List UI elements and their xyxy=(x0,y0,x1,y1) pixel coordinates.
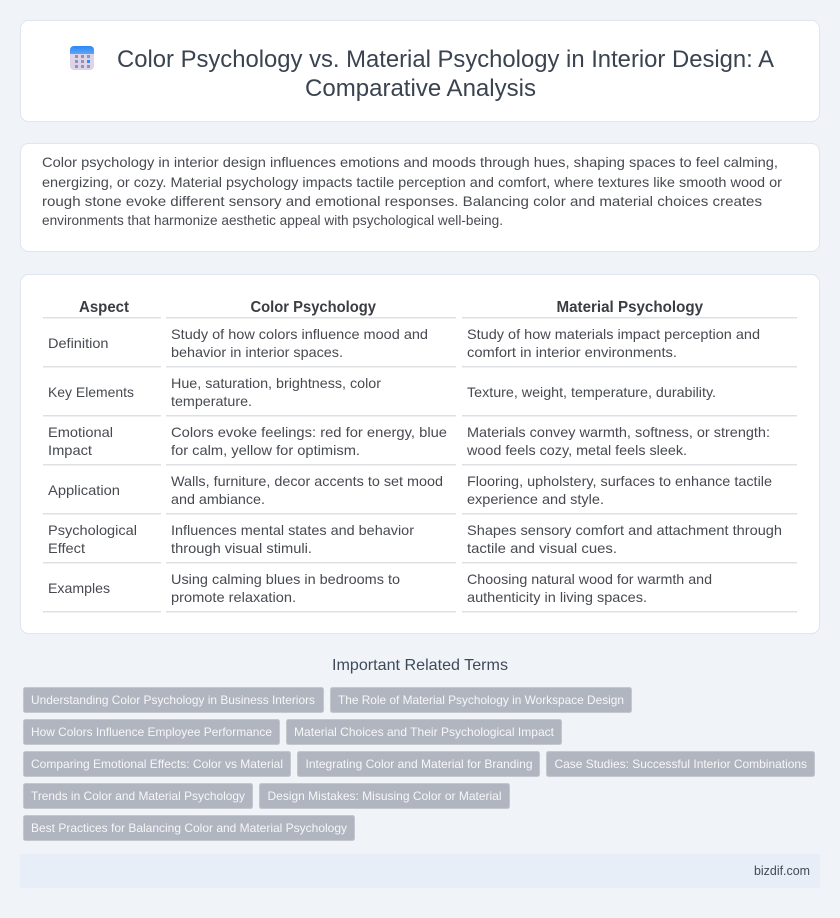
title: Comparative Analysis xyxy=(305,75,536,102)
panel: introduction text: energizing, or cozy. Material psychology impacts tactile perception and comfort, where textures like smooth wood or xyxy=(42,174,782,190)
panel: introduction text: Color psychology in interior design influences emotions and moods through hues, shaping spaces to feel calming, xyxy=(42,154,778,170)
table header row: Aspect xyxy=(79,299,130,316)
table row: key elements: Texture, weight, temperature, durability. xyxy=(467,384,716,400)
table header row: Material Psychology xyxy=(556,299,703,316)
related term tags xyxy=(24,688,814,840)
table row: psychological effect: Influences mental states and behavior xyxy=(171,522,414,538)
table row: psychological effect: tactile and visual cues. xyxy=(467,540,617,556)
table row: examples: promote relaxation. xyxy=(171,589,296,605)
table row: application: and ambiance. xyxy=(171,491,265,507)
table row: emotional impact: wood feels cozy, metal feels sleek. xyxy=(466,442,687,458)
table row: key elements: Key Elements xyxy=(48,384,134,400)
table row: key elements xyxy=(48,375,716,409)
table row: examples: Choosing natural wood for warmth and xyxy=(467,571,712,587)
table row: emotional impact: for calm, yellow for optimism. xyxy=(171,442,360,458)
table row: key elements: temperature. xyxy=(171,393,252,409)
panel: introduction text xyxy=(20,144,820,252)
table row: application: experience and style. xyxy=(467,491,604,507)
table row: psychological effect: Effect xyxy=(48,540,85,556)
panel: comparison table xyxy=(20,274,820,634)
table row: emotional impact: Materials convey warmth, softness, or strength: xyxy=(467,424,770,440)
related term tags: Integrating Color and Material for Branding xyxy=(306,757,532,771)
table row: definition: Study of how colors influence mood and xyxy=(171,326,428,342)
table row: definition: Study of how materials impact perception and xyxy=(467,326,760,342)
table row: emotional impact: Emotional xyxy=(48,424,113,440)
table row: definition: Definition xyxy=(48,335,108,351)
table row: examples: authenticity in living spaces. xyxy=(467,589,647,605)
related term tags: Case Studies: Successful Interior Combinations xyxy=(554,757,807,771)
table row: key elements: Hue, saturation, brightness, color xyxy=(171,375,381,391)
related term tags: How Colors Influence Employee Performance xyxy=(31,725,272,739)
panel: header xyxy=(20,20,820,122)
table row: application: Flooring, upholstery, surfaces to enhance tactile xyxy=(467,473,772,489)
table header row: Color Psychology xyxy=(250,299,376,316)
related term tags: Trends in Color and Material Psychology xyxy=(31,789,245,803)
table row: psychological effect: Shapes sensory comfort and attachment through xyxy=(467,522,782,538)
footer bar: bizdif.com xyxy=(754,863,810,878)
table row: application: Walls, furniture, decor accents to set mood xyxy=(171,473,443,489)
related term tags: Comparing Emotional Effects: Color vs Material xyxy=(31,757,283,771)
related term tags: Best Practices for Balancing Color and Material Psychology xyxy=(31,821,347,835)
table row: definition: behavior in interior spaces. xyxy=(171,344,343,360)
footer bar xyxy=(20,854,820,888)
table row: application: Application xyxy=(48,482,120,498)
related term tags: Material Choices and Their Psychological Impact xyxy=(294,725,555,739)
related term tags: Understanding Color Psychology in Business Interiors xyxy=(31,693,315,707)
table row: psychological effect: through visual stimuli. xyxy=(171,540,312,556)
icon: calendar grid xyxy=(70,46,94,70)
table row: examples: Examples xyxy=(48,580,110,596)
table row: psychological effect: Psychological xyxy=(48,522,137,538)
title xyxy=(117,46,774,102)
table row: definition: comfort in interior environments. xyxy=(467,344,677,360)
table row: emotional impact: Colors evoke feelings: red for energy, blue xyxy=(171,424,447,440)
heading: important related terms: Important Related Terms xyxy=(332,657,508,674)
table header row xyxy=(79,299,703,316)
title: Color Psychology vs. Material Psychology in Interior Design: A xyxy=(117,46,774,73)
table row: examples: Using calming blues in bedrooms to xyxy=(171,571,400,587)
table row: emotional impact xyxy=(48,424,770,458)
related term tags: The Role of Material Psychology in Workspace Design xyxy=(338,693,624,707)
table row: application xyxy=(48,473,772,507)
panel: introduction text: environments that harmonize aesthetic appeal with psychological well-being. xyxy=(42,212,503,228)
related term tags: Design Mistakes: Misusing Color or Material xyxy=(268,789,502,803)
table row: definition xyxy=(48,326,760,360)
panel: introduction text: rough stone evoke different sensory and emotional responses. Balancing color and material choices creates xyxy=(42,193,762,209)
table row: emotional impact: Impact xyxy=(48,442,92,458)
table row: examples xyxy=(48,571,712,605)
table row: psychological effect xyxy=(48,522,782,556)
